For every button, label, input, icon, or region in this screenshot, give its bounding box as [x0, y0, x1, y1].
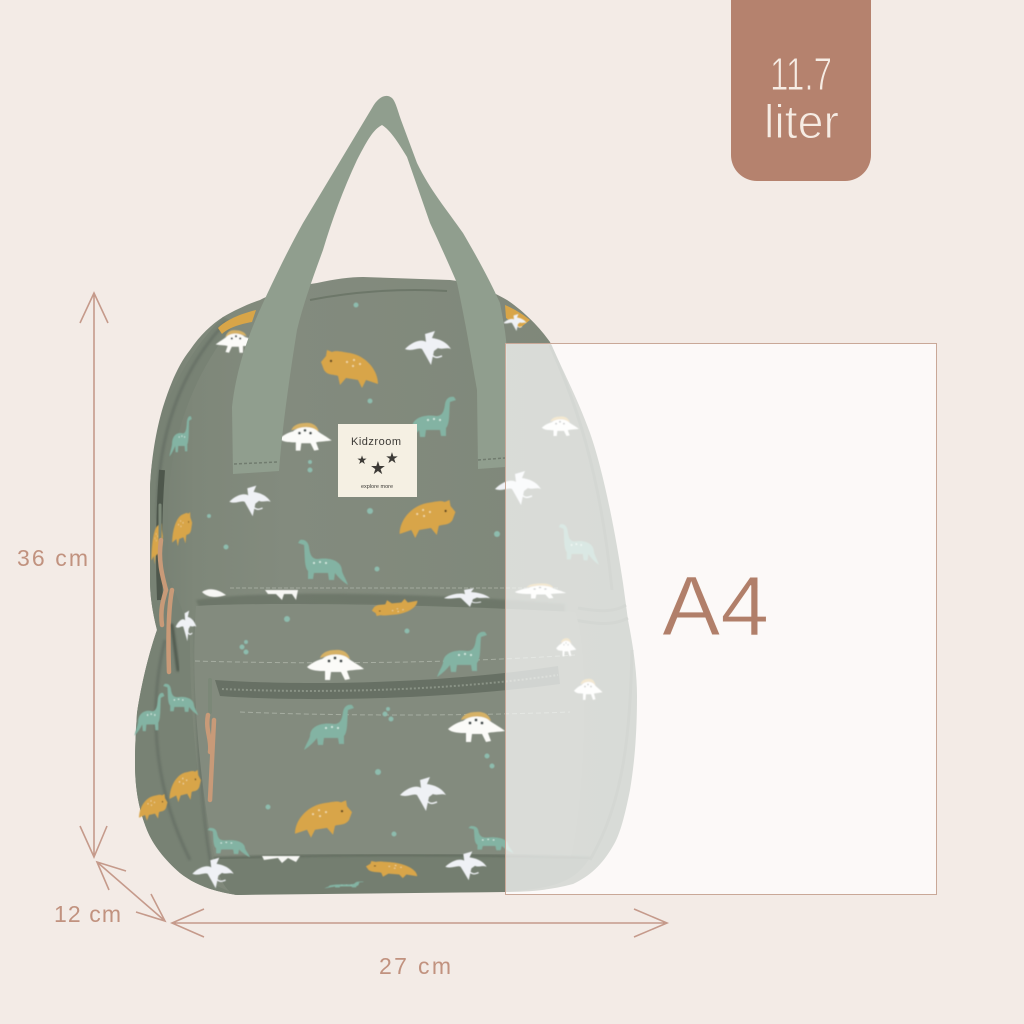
height label: 36 cm	[17, 545, 88, 571]
stars: ★	[357, 453, 367, 467]
handles	[232, 96, 507, 474]
stars: ★	[370, 458, 386, 479]
upper pocket flap shadow	[196, 594, 565, 616]
white pterosaurs	[405, 331, 451, 365]
tagline: explore more	[361, 484, 393, 490]
orange corner dinos	[218, 310, 256, 334]
depth label: 12 cm	[54, 901, 121, 927]
teal dots	[207, 302, 500, 836]
width label: 27 cm	[379, 953, 451, 979]
front zipper	[215, 666, 560, 699]
handle straps	[232, 96, 507, 474]
volume unit: liter	[764, 95, 839, 148]
main zipper	[159, 470, 162, 600]
bottom panel	[214, 855, 590, 895]
dinosaur pattern	[134, 302, 602, 888]
bottom panel shadow	[214, 855, 590, 858]
white cut-off dinos at seams	[202, 589, 300, 863]
side gusset shading	[135, 317, 237, 895]
backpack	[134, 96, 637, 895]
stars	[357, 449, 399, 479]
side seam shadow	[156, 322, 226, 880]
brand label	[338, 424, 417, 497]
brand name: Kidzroom	[351, 436, 401, 448]
depth arrow	[97, 862, 165, 921]
height arrow	[80, 293, 108, 857]
backpack body	[135, 277, 637, 895]
A4 sheet	[506, 344, 936, 894]
zipper pull: front pocket	[207, 680, 218, 805]
zipper stitching	[195, 655, 575, 715]
upper pocket stitching	[230, 587, 560, 589]
ghost side seams	[550, 345, 632, 860]
top panel seam	[310, 290, 447, 300]
volume badge	[731, 0, 871, 181]
front pocket panel	[194, 604, 584, 860]
width arrow	[172, 909, 667, 937]
handle stitching	[234, 458, 505, 464]
white stegosaurus	[279, 423, 332, 451]
zipper pull: main	[160, 505, 178, 672]
A4 text: A4	[662, 559, 769, 653]
stars: ★	[385, 449, 399, 467]
teal brontosaurus	[406, 397, 456, 442]
orange triceratops	[321, 350, 378, 388]
volume value: 11.7	[770, 48, 832, 100]
